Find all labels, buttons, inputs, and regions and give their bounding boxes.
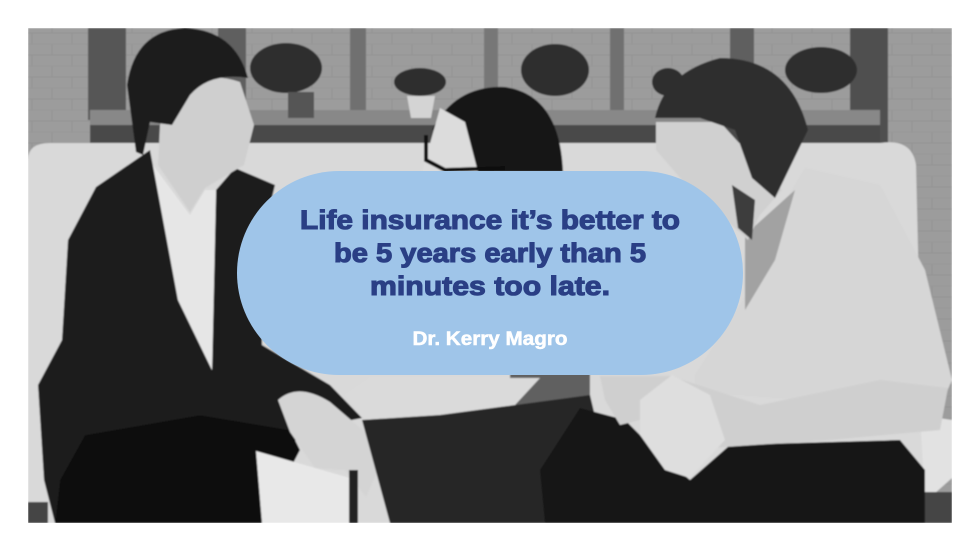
face and neck [158,78,254,212]
hair [127,28,248,155]
person: man on right [540,58,952,523]
arm [509,376,540,407]
potted plants [250,43,857,118]
quote text: minutes too late. [370,271,610,301]
quote text: Life insurance it’s better to [300,205,680,235]
beard [732,185,755,240]
jeans [362,395,596,523]
quote text: be 5 years early than 5 [334,238,646,268]
face [429,108,480,171]
shirt [918,258,952,389]
pill background [237,171,743,375]
quote pill [237,171,743,375]
forearm [600,376,948,450]
shelving unit [88,28,888,146]
trousers [55,415,300,523]
person: woman with paper on left [38,28,378,523]
neck [745,190,795,310]
sofa [28,142,952,523]
face [656,122,782,240]
jacket [38,150,362,523]
glasses [426,135,505,170]
shirt [153,165,216,370]
top [509,375,591,406]
hand on knee [276,390,352,440]
person: seated woman in the middle [345,87,596,523]
paper [256,451,357,523]
trousers [540,408,925,523]
attribution: Dr. Kerry Magro [412,329,568,350]
clasped hands [640,375,725,478]
quote text [300,205,680,301]
hair [432,87,563,172]
hair [655,58,808,198]
